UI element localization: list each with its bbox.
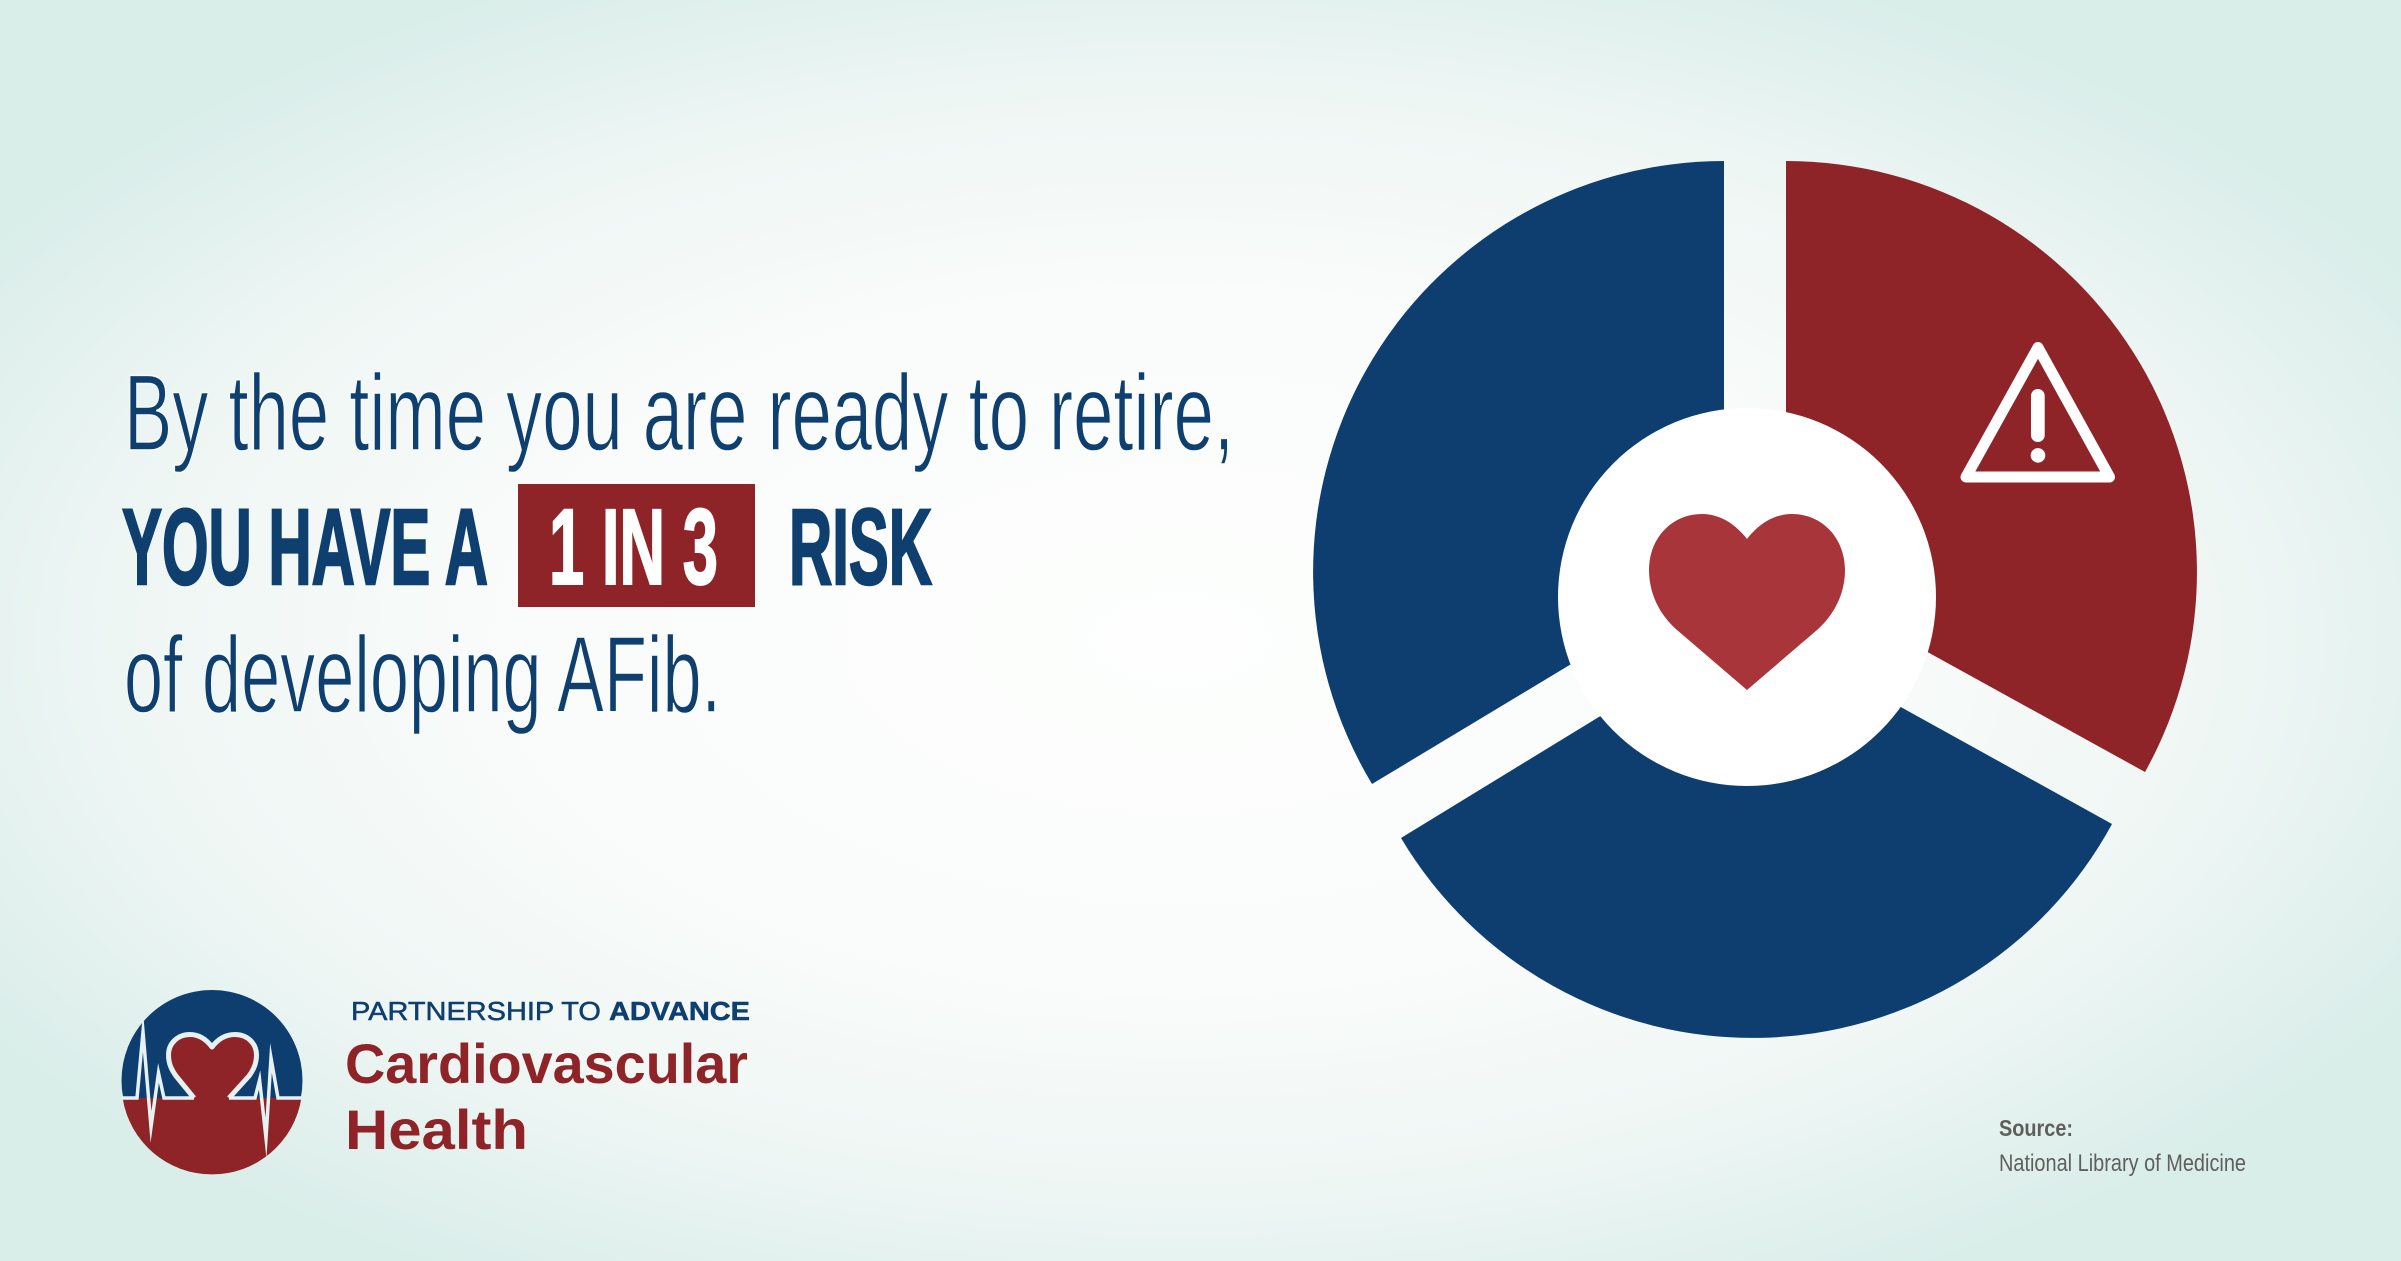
headline line 2 lead: YOU HAVE A <box>122 486 488 607</box>
segment: red upper right <box>1786 161 2197 772</box>
highlight box: 1 in 3 <box>518 484 755 607</box>
wordmark: partnership to advance: PARTNERSHIP TO ADVANCE <box>351 996 750 1026</box>
icon: warning triangle <box>1966 348 2110 477</box>
segment: navy bottom <box>1401 624 2112 1038</box>
source note <box>1999 1115 2246 1177</box>
headline line 3: of developing AFib. <box>124 614 721 736</box>
highlight box: 1 in 3: 1 IN 3 <box>549 486 718 607</box>
segment: navy upper left <box>1313 161 1724 784</box>
headline line 2 end: RISK <box>789 486 932 607</box>
headline text block <box>122 352 1234 736</box>
pie chart: 1 in 3 <box>1313 161 2197 1038</box>
source name: National Library of Medicine <box>1999 1150 2246 1177</box>
icon: heart <box>1649 514 1845 690</box>
centre circle <box>1558 408 1936 786</box>
headline line 1: By the time you are ready to retire, <box>124 352 1234 474</box>
logo: heart and pulse emblem <box>122 990 302 1174</box>
logo wordmark <box>345 996 750 1161</box>
source label: Source: <box>1999 1115 2073 1141</box>
wordmark: cardiovascular: Cardiovascular <box>345 1032 748 1095</box>
wordmark: health: Health <box>345 1098 528 1161</box>
